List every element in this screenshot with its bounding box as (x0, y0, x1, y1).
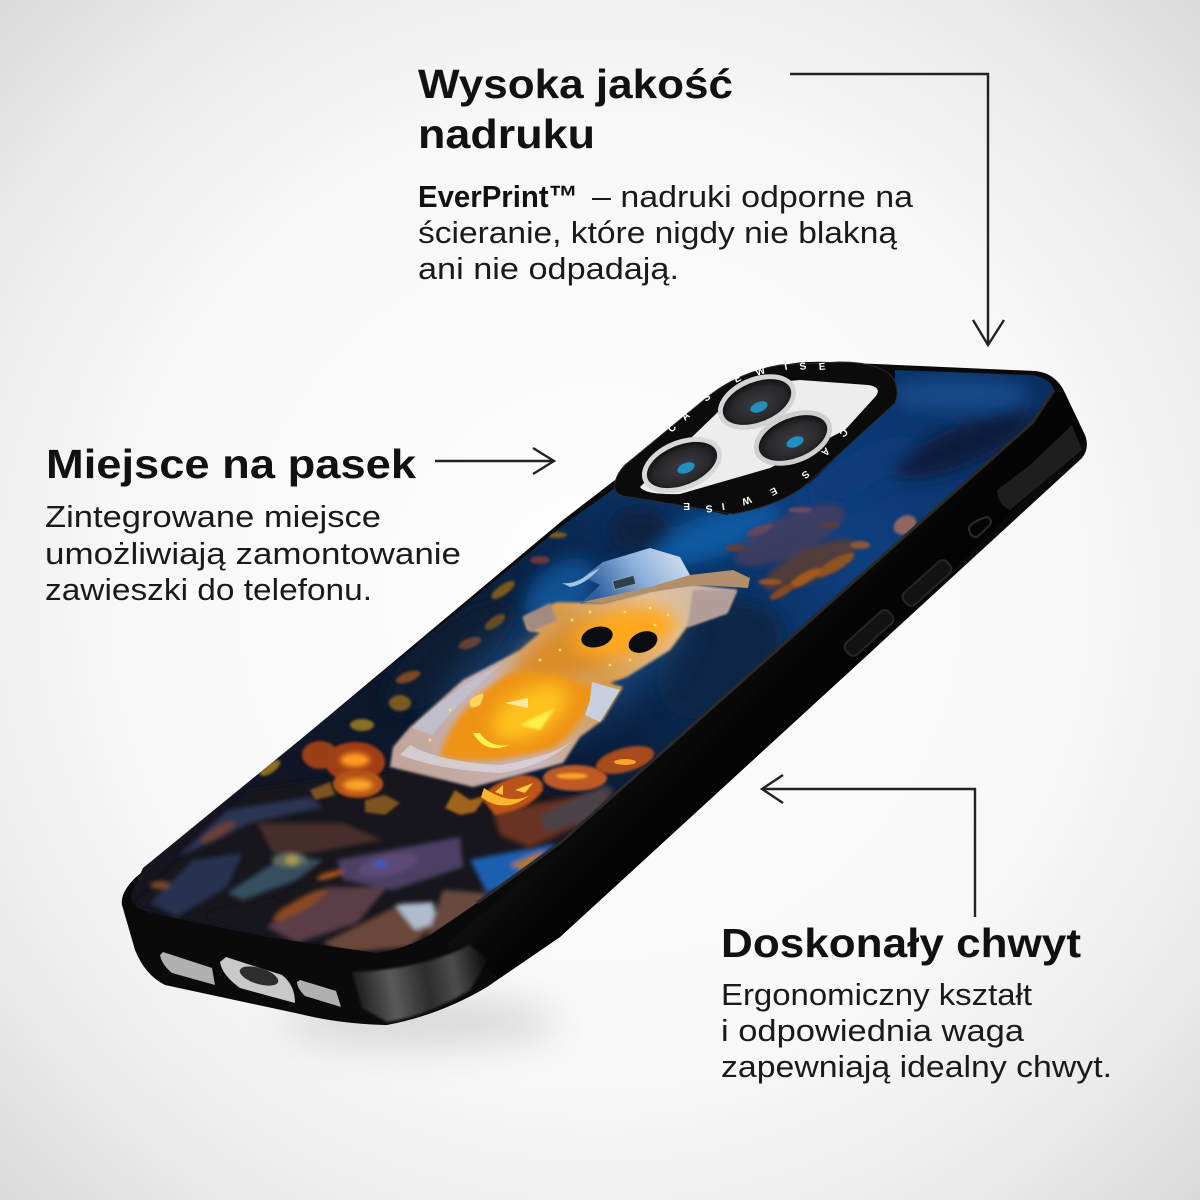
lens left (634, 426, 730, 504)
printed artwork (131, 370, 1054, 953)
phone case with printed ghost artwork (100, 340, 1100, 1025)
case side wall (445, 390, 1085, 978)
arrow to strap slot (435, 448, 554, 474)
charging port (220, 957, 295, 1003)
heading: nadruku (418, 111, 595, 157)
sparkles (429, 607, 669, 741)
side button lower (842, 608, 896, 658)
hat brim (583, 570, 750, 603)
strap slot (997, 425, 1082, 510)
lens top (710, 363, 804, 441)
brand ring lettering: S (705, 502, 713, 514)
hat buckle (612, 575, 636, 590)
brand ring lettering: S (701, 391, 713, 404)
callout: strap slot (45, 441, 554, 607)
description: – nadruki odporne na (592, 179, 914, 214)
brand ring lettering: W (754, 365, 767, 379)
hat (580, 548, 690, 604)
side button middle (900, 558, 954, 608)
ghost (390, 548, 750, 787)
ghost neck glow (504, 616, 611, 681)
speaker right (297, 980, 341, 1007)
description: Zintegrowane miejsce (45, 499, 381, 534)
description: ani nie odpadają. (418, 251, 679, 286)
brand ring lettering: C (666, 422, 679, 435)
brand ring lettering: A (819, 445, 832, 458)
brand ring lettering: E (767, 484, 779, 497)
sky clouds (470, 372, 1036, 712)
description: umożliwiają zamontowanie (45, 536, 461, 571)
arrow to phone side (762, 775, 975, 917)
description: Ergonomiczny kształt (721, 977, 1032, 1012)
description (45, 499, 461, 607)
autumn trees (257, 492, 920, 779)
description: i odpowiednia waga (721, 1013, 1025, 1048)
heading (418, 61, 733, 157)
description (418, 179, 914, 286)
brand ring lettering (666, 361, 850, 514)
brand ring lettering: A (680, 410, 692, 423)
description: zawieszki do telefonu. (45, 572, 372, 607)
brand ring lettering: W (740, 493, 753, 507)
leaf pile and rocks (135, 770, 600, 953)
ghost glow (427, 580, 692, 753)
description: zapewniają idealny chwyt. (721, 1049, 1112, 1084)
corner highlight (352, 945, 488, 1022)
ghost body (390, 583, 737, 787)
callout: print quality (418, 61, 1004, 345)
brand ring lettering: S (799, 468, 811, 481)
phone shadow (280, 1000, 560, 1044)
ghost ear left (523, 603, 557, 632)
hat wisp (562, 568, 600, 587)
camera window (640, 380, 878, 494)
heading: Miejsce na pasek (46, 441, 416, 487)
artwork edge highlight (477, 390, 1054, 903)
camera surround (615, 361, 897, 514)
pumpkins (302, 741, 657, 848)
ghost face glow (570, 600, 680, 664)
camera ring (615, 362, 897, 514)
eyes (581, 626, 613, 648)
brand ring lettering: I (721, 500, 725, 511)
ghost ear right (687, 590, 737, 627)
ghost robe folds (400, 738, 575, 773)
brand ring lettering: S (799, 361, 807, 373)
case body (122, 362, 1087, 1025)
heading: Doskonały chwyt (721, 920, 1081, 966)
description: ścieranie, które nigdy nie blakną (418, 215, 898, 250)
ghost chest glow (440, 672, 596, 761)
brand ring lettering: C (837, 426, 850, 439)
brand ring lettering: E (683, 500, 690, 511)
brand ring lettering: E (818, 362, 826, 373)
brand ring lettering: I (784, 362, 788, 373)
heading: Wysoka jakość (418, 61, 733, 107)
side button top (969, 517, 991, 537)
lens right (746, 399, 840, 477)
speaker left (160, 952, 215, 985)
description (721, 977, 1112, 1084)
arrow to phone top (790, 74, 1004, 345)
callout: grip (721, 775, 1112, 1084)
description: EverPrint™ (418, 179, 578, 214)
brand ring lettering: E (732, 373, 744, 386)
